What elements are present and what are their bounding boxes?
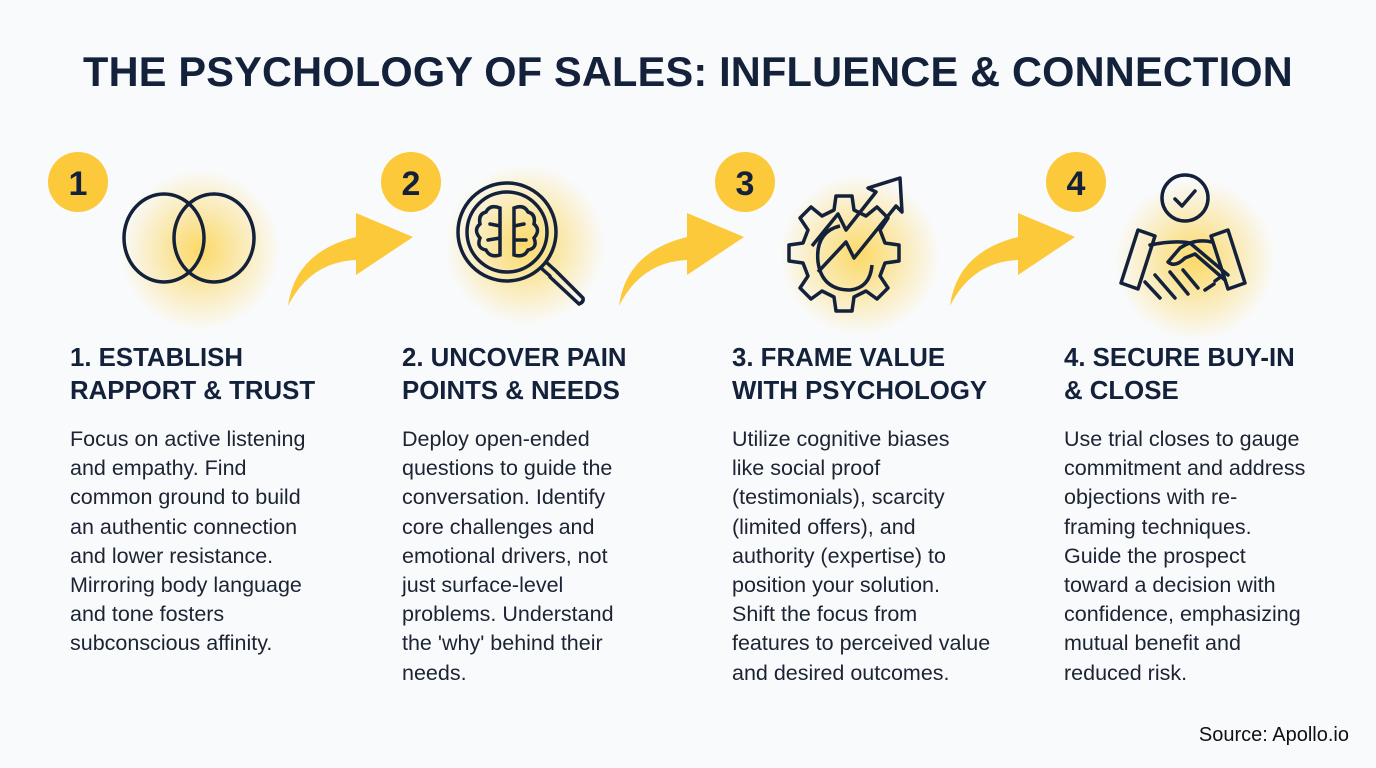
icon: venn circles — [124, 194, 254, 282]
text 1: and tone fosters — [70, 602, 224, 626]
text 1: common ground to build — [70, 485, 301, 509]
heading 4: 4. SECURE BUY-IN — [1064, 344, 1295, 372]
heading 1: RAPPORT & TRUST — [70, 377, 315, 405]
heading 3: 3. FRAME VALUE — [732, 344, 945, 372]
text 2: core challenges and — [402, 515, 594, 539]
badge 2: 2 — [402, 165, 420, 203]
heading 1: 1. ESTABLISH — [70, 344, 243, 372]
text 4: framing techniques. — [1064, 515, 1252, 539]
text 3: Shift the focus from — [732, 602, 917, 626]
text 4: reduced risk. — [1064, 661, 1187, 685]
icon: handshake with check — [1121, 175, 1245, 298]
text 2: emotional drivers, not — [402, 544, 608, 568]
title: THE PSYCHOLOGY OF SALES: INFLUENCE & CONNECTION — [83, 48, 1293, 95]
text 2: problems. Understand — [402, 602, 614, 626]
text 1: and lower resistance. — [70, 544, 273, 568]
text 4: confidence, emphasizing — [1064, 602, 1301, 626]
text 4: objections with re- — [1064, 485, 1237, 509]
text 3: authority (expertise) to — [732, 544, 946, 568]
arrow 1 — [288, 213, 413, 306]
glows — [120, 165, 1275, 340]
badge 4 — [1046, 152, 1106, 212]
text 2 — [401, 427, 614, 685]
source: Source: Apollo.io — [1199, 724, 1349, 746]
text 1 — [70, 427, 305, 655]
text 4: Use trial closes to gauge — [1064, 427, 1299, 451]
icon: gear with rising arrow — [789, 178, 902, 311]
text 4: commitment and address — [1064, 456, 1305, 480]
arrow 2 — [619, 213, 744, 306]
text 3: like social proof — [732, 456, 880, 480]
text 1: Focus on active listening — [70, 427, 305, 451]
icon: magnifier with brain — [458, 183, 583, 304]
text 4 — [1064, 427, 1305, 685]
text 2: Deploy open-ended — [402, 427, 590, 451]
badge 4: 4 — [1067, 165, 1086, 203]
text 3: (limited offers), and — [732, 515, 916, 539]
text 3: Utilize cognitive biases — [732, 427, 950, 451]
text 4: mutual benefit and — [1064, 631, 1241, 655]
heading 4 — [1064, 344, 1295, 405]
text 3: position your solution. — [732, 573, 940, 597]
heading 2: POINTS & NEEDS — [402, 377, 620, 405]
text 4: toward a decision with — [1064, 573, 1276, 597]
text 1: subconscious affinity. — [70, 631, 272, 655]
text 3: (testimonials), scarcity — [732, 485, 945, 509]
text 1: Mirroring body language — [70, 573, 302, 597]
arrow 3 — [950, 213, 1075, 306]
badge 3 — [715, 152, 775, 212]
text 2: questions to guide the — [402, 456, 612, 480]
heading 2 — [402, 344, 627, 405]
text 1: an authentic connection — [70, 515, 297, 539]
heading 1 — [70, 344, 315, 405]
text 2: needs. — [402, 661, 467, 685]
text 2: conversation. Identify — [402, 485, 605, 509]
heading 2: 2. UNCOVER PAIN — [402, 344, 627, 372]
text 3: and desired outcomes. — [732, 661, 950, 685]
heading 4: & CLOSE — [1064, 377, 1179, 405]
graphics: badges, icons, arrows — [48, 152, 1270, 336]
badge 1 — [48, 152, 108, 212]
text 2: just surface-level — [402, 573, 563, 597]
badge 3: 3 — [736, 165, 754, 203]
text 4: Guide the prospect — [1064, 544, 1246, 568]
heading 3: WITH PSYCHOLOGY — [732, 377, 987, 405]
badge 1: 1 — [69, 165, 87, 203]
heading 3 — [732, 344, 987, 405]
text 3: features to perceived value — [732, 631, 990, 655]
badge 2 — [381, 152, 441, 212]
text 2: the 'why' behind their — [402, 631, 603, 655]
text 3 — [732, 427, 990, 685]
text 1: and empathy. Find — [70, 456, 246, 480]
